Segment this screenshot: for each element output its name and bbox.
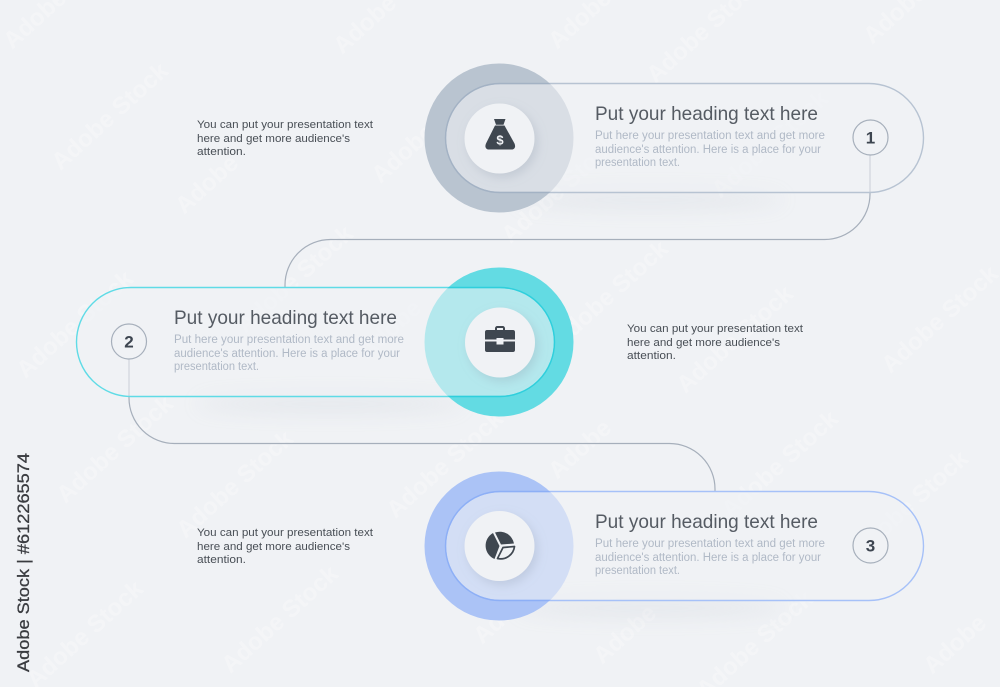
side note 2: here and get more audience's — [627, 337, 781, 349]
number badge 3 — [853, 528, 888, 563]
number badge 1 — [853, 120, 888, 155]
watermark pattern: Adobe Stock — [231, 220, 359, 339]
icon: briefcase — [485, 326, 515, 352]
big circle 3 — [424, 472, 574, 620]
watermark pattern: Adobe Stock — [706, 85, 834, 204]
side note 2: You can put your presentation text — [627, 323, 803, 335]
body text 3 — [595, 538, 825, 577]
icon: money bag: $ — [496, 132, 504, 148]
icon: pie chart — [486, 532, 514, 559]
watermark pattern: Adobe Stock — [846, 445, 974, 564]
number badge 1: 1 — [866, 128, 875, 148]
watermark pattern: Adobe Stock — [366, 70, 494, 189]
side note 1: attention. — [197, 146, 246, 158]
panel: step 3 — [424, 472, 924, 620]
side note 3: here and get more audience's — [197, 541, 351, 553]
watermark pattern: Adobe — [468, 579, 542, 649]
connector from step 1 to step 2 — [285, 155, 870, 287]
side note 3: attention. — [197, 554, 246, 566]
watermark pattern: Adobe — [543, 414, 617, 484]
watermark pattern: Adobe Stock — [876, 260, 1000, 379]
side note 2: attention. — [627, 350, 676, 362]
body text 2: audience's attention. Here is a place for your — [174, 348, 400, 360]
body text 3: presentation text. — [595, 565, 680, 577]
icon disc 1 — [464, 104, 534, 174]
panel: step 1 — [424, 64, 924, 212]
heading 1: Put your heading text here — [595, 103, 818, 125]
watermark pattern: Adobe — [170, 149, 244, 219]
body text 2: Put here your presentation text and get more — [174, 334, 404, 346]
watermark pattern: Adobe Stock — [46, 57, 174, 176]
panel: step 2 — [76, 268, 574, 416]
number badge 3: 3 — [866, 536, 875, 556]
side note 3 — [197, 527, 373, 566]
watermark pattern: Adobe — [918, 609, 992, 679]
icon: money bag — [485, 119, 515, 150]
body text 1: Put here your presentation text and get more — [595, 130, 825, 142]
body text 3: Put here your presentation text and get more — [595, 538, 825, 550]
pill 1 — [446, 84, 924, 192]
big circle 2 — [424, 268, 574, 416]
pill 2 — [76, 288, 554, 396]
body text 2: presentation text. — [174, 361, 259, 373]
heading 2: Put your heading text here — [174, 307, 397, 329]
big circle 1 — [424, 64, 574, 212]
watermark pattern: Adobe — [588, 599, 662, 669]
watermark pattern: Adobe Stock — [716, 405, 844, 524]
body text 1 — [595, 130, 825, 169]
number badge 2 — [112, 324, 146, 359]
pill 3 — [446, 492, 924, 600]
stock id label: Adobe Stock | #612265574 — [14, 453, 33, 672]
watermark pattern: Adobe Stock — [381, 405, 509, 524]
side note 3: You can put your presentation text — [197, 527, 373, 539]
side note 2 — [627, 323, 803, 362]
body text 1: presentation text. — [595, 157, 680, 169]
body text 2 — [174, 334, 404, 373]
watermark pattern: Adobe Stock — [671, 280, 799, 399]
icon disc 2 — [465, 308, 535, 378]
connector from step 2 to step 3 — [129, 359, 715, 491]
icon disc 3 — [464, 511, 534, 581]
number badge 2: 2 — [124, 332, 134, 352]
watermark pattern: Adobe Stock — [51, 390, 179, 509]
watermark pattern: Adobe Stock — [496, 130, 624, 249]
watermark pattern: Adobe Stock — [216, 560, 344, 679]
watermark pattern: Adobe Stock — [546, 235, 674, 354]
heading 3: Put your heading text here — [595, 511, 818, 533]
side note 1 — [197, 119, 373, 158]
watermark pattern: Adobe Stock — [171, 425, 299, 544]
body text 1: audience's attention. Here is a place for your — [595, 144, 821, 156]
watermark pattern: Adobe Stock — [11, 265, 139, 384]
watermark pattern: Adobe — [353, 294, 427, 364]
side note 1: You can put your presentation text — [197, 119, 373, 131]
body text 3: audience's attention. Here is a place for your — [595, 552, 821, 564]
side note 1: here and get more audience's — [197, 133, 351, 145]
